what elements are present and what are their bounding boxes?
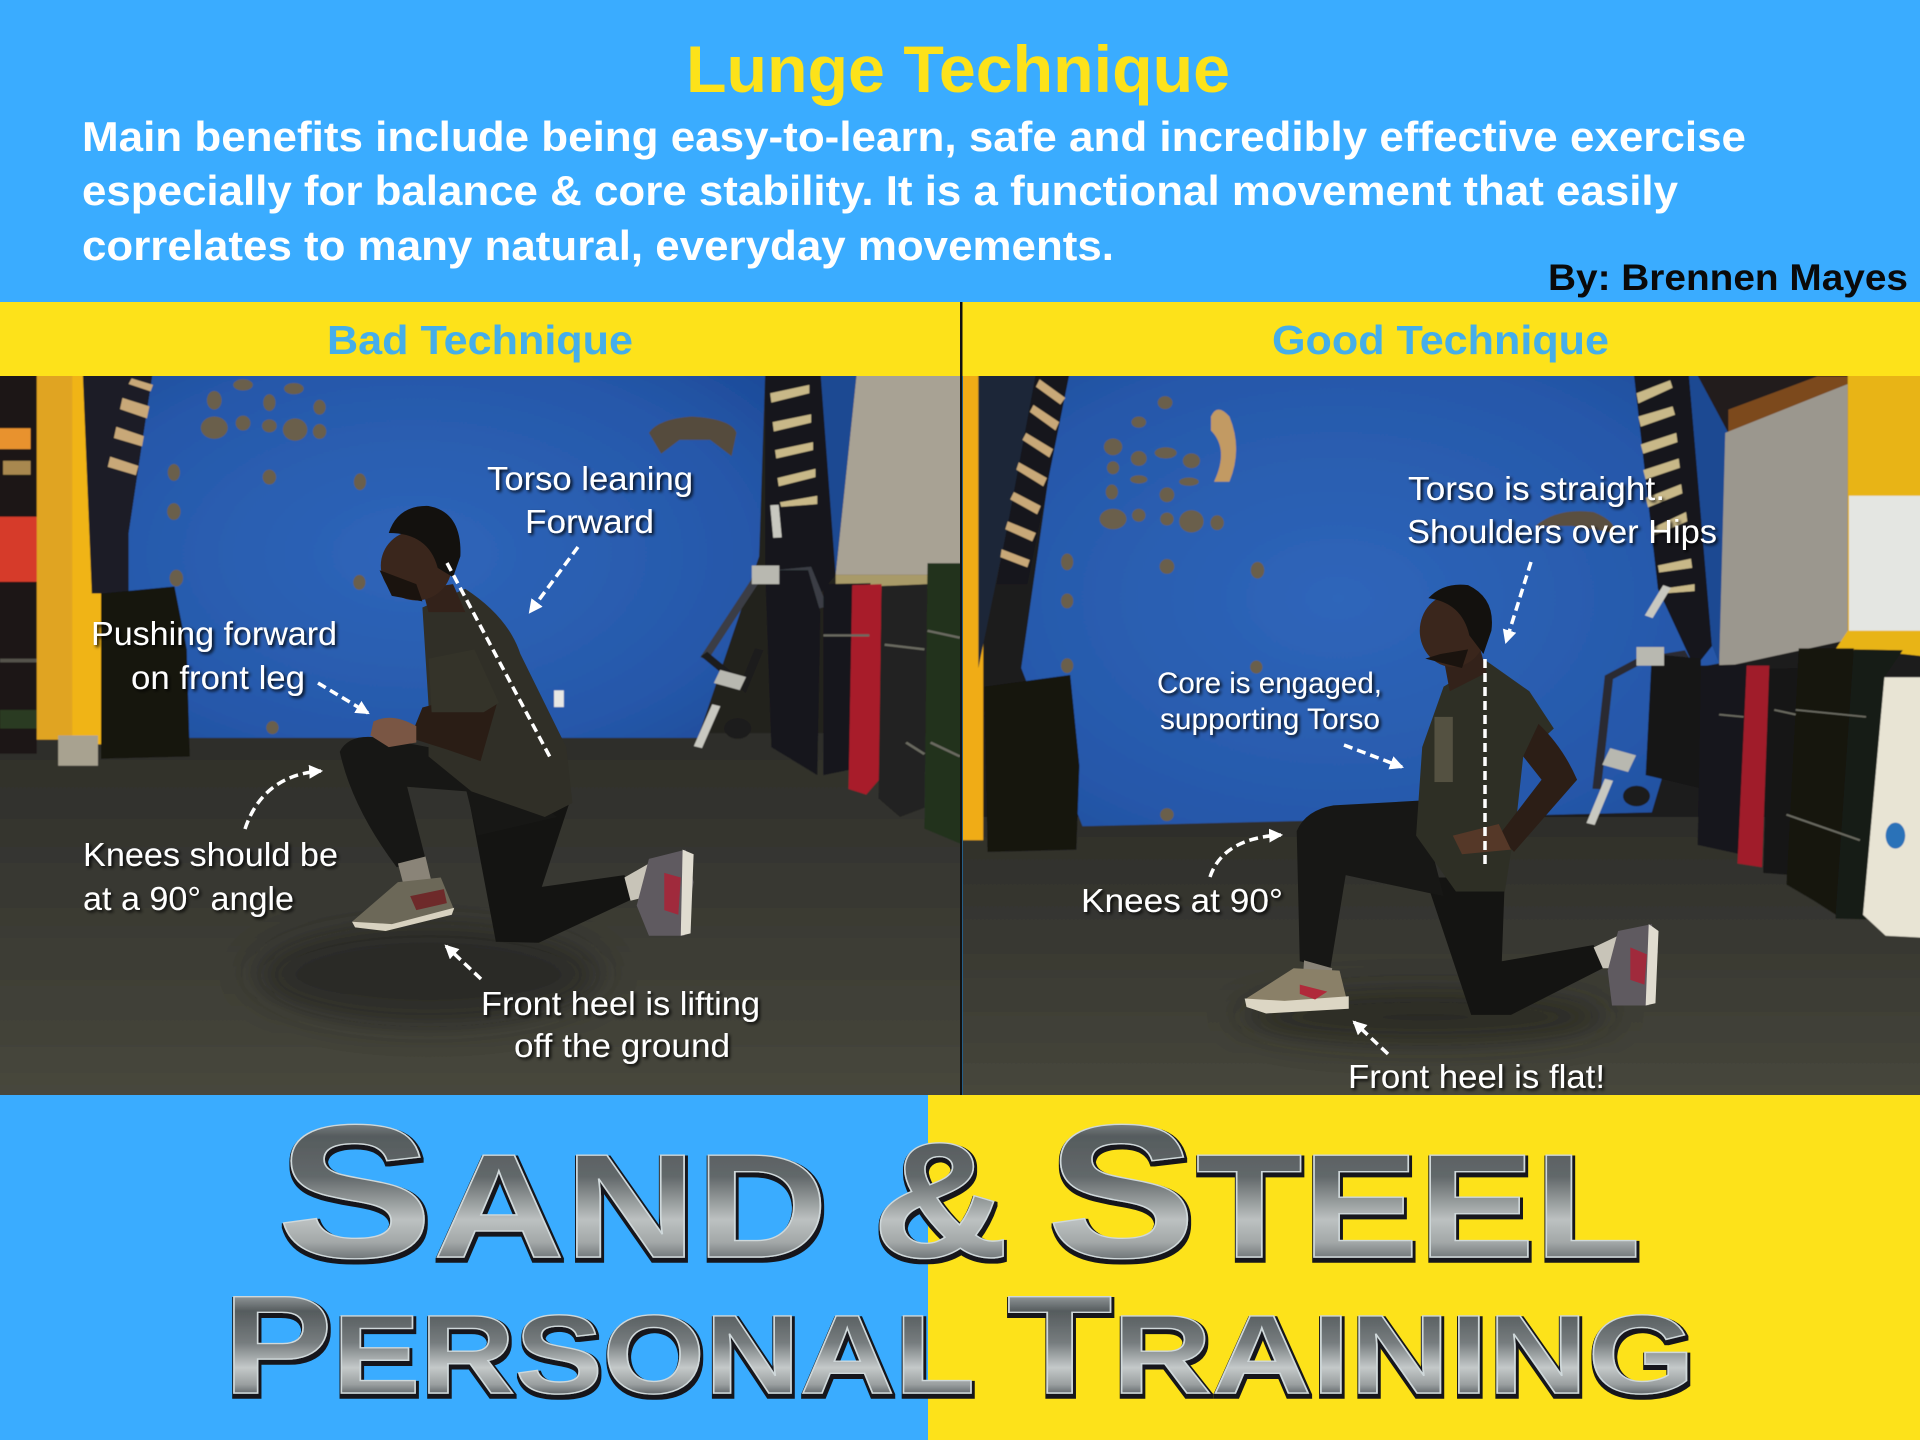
callout: torso leaning <box>487 460 693 612</box>
logo line: sand and steel <box>277 1086 1641 1298</box>
callout: knee angle <box>83 771 338 917</box>
vertical back line <box>1483 659 1487 868</box>
intro text <box>82 113 1746 269</box>
column divider <box>960 302 962 1095</box>
header panel <box>0 0 1920 302</box>
column heading band <box>0 302 1920 376</box>
callout: knee angle: Knees should be <box>83 836 338 873</box>
gym scene right <box>936 361 1920 1129</box>
heading: bad technique: Bad Technique <box>327 317 633 363</box>
callout: torso straight: Torso is straight. <box>1408 470 1665 507</box>
callout: core engaged <box>1157 667 1402 767</box>
callout: heel lifting: Front heel is lifting <box>481 985 760 1022</box>
logo line: personal training: PERSONAL <box>223 1266 975 1423</box>
gym scene left <box>0 361 986 1129</box>
callout: heel lifting: off the ground <box>514 1027 730 1064</box>
callout: torso leaning: Forward <box>525 503 654 540</box>
callout: torso straight: Shoulders over Hips <box>1407 513 1717 550</box>
person: leaning lunge <box>340 506 694 943</box>
callout: core engaged: supporting Torso <box>1160 703 1380 736</box>
callout: knees at 90: Knees at 90° <box>1081 882 1283 919</box>
panel: bad technique photo <box>0 361 986 1129</box>
logo line: sand and steel: & <box>872 1108 1009 1292</box>
author byline: By: Brennen Mayes <box>1548 257 1908 298</box>
intro text: especially for balance & core stability. It is a functional movement that easily <box>82 167 1679 214</box>
intro text: Main benefits include being easy-to-learn, safe and incredibly effective exercise <box>82 113 1746 160</box>
title: Lunge Technique <box>686 32 1230 106</box>
callout: torso straight <box>1407 470 1717 642</box>
callout: heel flat <box>1348 1022 1605 1095</box>
logo line: personal training <box>223 1266 1695 1423</box>
logo line: sand and steel: SAND <box>277 1086 828 1298</box>
callout: heel lifting <box>446 946 760 1064</box>
logo line: sand and steel: STEEL <box>1047 1086 1641 1298</box>
callout: knee angle: at a 90° angle <box>83 880 294 917</box>
panel: good technique photo <box>936 361 1920 1129</box>
intro text: correlates to many natural, everyday movements. <box>82 222 1114 269</box>
callout: pushing forward: on front leg <box>131 659 305 696</box>
footer brand panel <box>0 1086 1920 1440</box>
callout: pushing forward: Pushing forward <box>91 615 337 652</box>
callout: core engaged: Core is engaged, <box>1157 667 1382 700</box>
callout: heel flat: Front heel is flat! <box>1348 1058 1605 1095</box>
logo line: personal training: TRAINING <box>1007 1266 1695 1423</box>
heading: good technique: Good Technique <box>1272 317 1609 363</box>
back line <box>447 563 551 759</box>
person: upright lunge <box>1245 585 1659 1015</box>
callout: pushing forward <box>91 615 368 713</box>
callout: knees at 90 <box>1081 835 1283 919</box>
callout: torso leaning: Torso leaning <box>487 460 693 497</box>
